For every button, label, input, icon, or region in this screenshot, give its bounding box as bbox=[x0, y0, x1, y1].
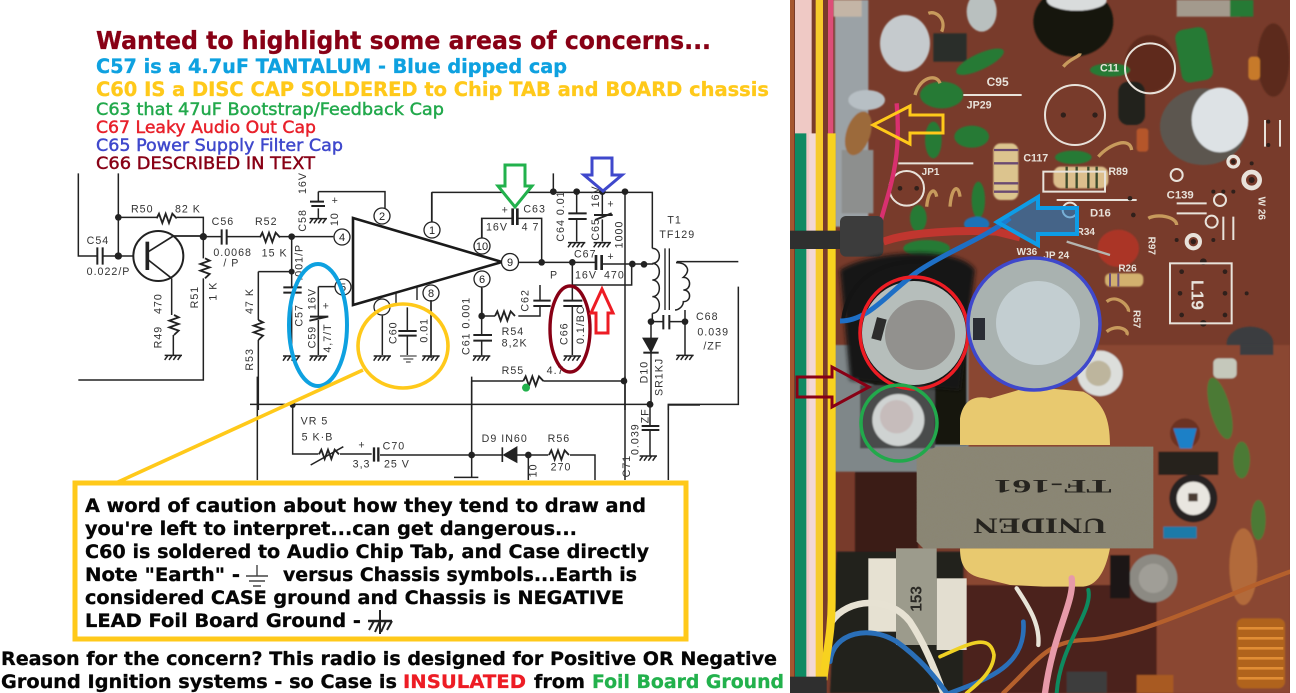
schematic: right section with output caps and transformer: C65 bbox=[590, 218, 602, 241]
schematic: right section with output caps and transformer: SR1KJ bbox=[654, 358, 666, 396]
schematic: left section with transistor and amplifier inputs bbox=[78, 172, 430, 410]
photo: silkscreen labels on board: R97 bbox=[1145, 237, 1156, 255]
photo: C67 electrolytic capacitor bbox=[862, 281, 966, 385]
schematic: left section with transistor and amplifier inputs: 1 K bbox=[208, 282, 220, 301]
schematic: lower section with VR5, C70, D9, R56: + bbox=[358, 439, 366, 451]
schematic: right section with output caps and transformer: TF129 bbox=[659, 229, 695, 241]
photo: silkscreen labels on board: D16 bbox=[1090, 208, 1111, 220]
schematic: lower section with VR5, C70, D9, R56 bbox=[250, 377, 700, 480]
caution text lines: versus Chassis symbols...Earth is bbox=[283, 565, 637, 586]
legend line C66: C66 DESCRIBED IN TEXT bbox=[96, 154, 316, 174]
bottom explanation text: Ground Ignition systems - so Case is bbox=[1, 671, 397, 693]
schematic: right section with output caps and transformer: R54 bbox=[502, 326, 524, 338]
schematic: right section with output caps and transformer: /ZF bbox=[703, 340, 722, 352]
photo: cap highlight blue arrow bbox=[997, 197, 1077, 245]
schematic: right section with output caps and transformer: C62 bbox=[519, 289, 531, 312]
schematic: left section with transistor and amplifier inputs: R50 bbox=[131, 204, 154, 216]
schematic: right section with output caps and transformer: C67 bbox=[574, 248, 597, 260]
schematic: lower section with VR5, C70, D9, R56: VR 5 bbox=[301, 416, 328, 428]
schematic: lower section with VR5, C70, D9, R56: 5 K·B bbox=[302, 432, 333, 444]
schematic: left section with transistor and amplifier inputs: + bbox=[332, 195, 339, 207]
schematic: left section with transistor and amplifier inputs: / P bbox=[223, 258, 239, 270]
schematic: right section with output caps and transformer: 0.1/BC bbox=[575, 305, 587, 344]
bottom explanation text: from bbox=[534, 671, 585, 693]
schematic: amplifier chip triangle with pin numbers: 2 bbox=[379, 211, 385, 223]
photo: yellow transformer bobbins bbox=[960, 387, 1110, 587]
photo: silkscreen labels on board: C95 bbox=[987, 75, 1009, 89]
schematic: left section with transistor and amplifier inputs: C59 bbox=[306, 326, 318, 348]
schematic: lower section with VR5, C70, D9, R56: D9 IN60 bbox=[482, 433, 528, 445]
schematic: right section with output caps and transformer: C63 bbox=[523, 204, 546, 216]
photo: metal transformer core bbox=[917, 447, 1153, 548]
schematic diagram bbox=[78, 172, 738, 480]
schematic: amplifier chip triangle with pin numbers: 1 bbox=[429, 225, 435, 237]
schematic: left section with transistor and amplifier inputs: 0.01 bbox=[418, 318, 430, 343]
photo panel: circuit board bbox=[790, 0, 1290, 693]
caution text lines: you're left to interpret...can get dangerous... bbox=[85, 519, 577, 540]
legend line C60: C60 IS a DISC CAP SOLDERED to Chip TAB and BOARD chassis bbox=[96, 78, 769, 101]
caution text lines: LEAD Foil Board Ground - bbox=[85, 611, 361, 632]
photo: silkscreen labels on board: W36 bbox=[1017, 247, 1038, 258]
schematic: lower section with VR5, C70, D9, R56: C70 bbox=[383, 440, 405, 452]
legend line C65: C65 Power Supply Filter Cap bbox=[96, 136, 343, 156]
photo: silkscreen labels on board: R89 bbox=[1108, 166, 1128, 178]
schematic: amplifier chip triangle with pin numbers: 8 bbox=[428, 288, 434, 300]
schematic: left section with transistor and amplifier inputs: 16V bbox=[306, 288, 318, 310]
photo: silkscreen labels on board: C117 bbox=[1023, 153, 1048, 165]
photo: silkscreen labels on board: C11 bbox=[1100, 63, 1119, 75]
schematic: right section with output caps and transformer: P bbox=[550, 269, 558, 281]
legend line C67: C67 Leaky Audio Out Cap bbox=[96, 118, 316, 138]
caution text lines bbox=[85, 496, 649, 632]
bottom explanation text bbox=[1, 648, 784, 693]
photo: C65 electrolytic capacitor bbox=[969, 259, 1099, 389]
legend: colour-coded capacitor notes bbox=[96, 55, 769, 174]
schematic: lower section with VR5, C70, D9, R56: 0.039 bbox=[629, 423, 641, 455]
caution text box bbox=[75, 483, 686, 639]
schematic: amplifier chip triangle with pin numbers: 6 bbox=[479, 274, 485, 286]
schematic: right section with output caps and transformer: 4.7 bbox=[547, 365, 564, 377]
schematic: left section with transistor and amplifier inputs: C56 bbox=[212, 216, 234, 228]
schematic: left section with transistor and amplifier inputs: C58 bbox=[297, 209, 309, 232]
photo: blue and black wires bbox=[840, 218, 1010, 321]
schematic: lower section with VR5, C70, D9, R56: R56 bbox=[548, 433, 570, 445]
schematic: left section with transistor and amplifier inputs: R51 bbox=[189, 286, 201, 308]
photo: silkscreen labels on board: C139 bbox=[1167, 189, 1194, 201]
arrow: green pointing to C63 bbox=[498, 165, 532, 207]
bottom explanation text: Reason for the concern? This radio is designed for Positive OR Negative bbox=[1, 648, 777, 670]
schematic: left section with transistor and amplifier inputs: 47 K bbox=[244, 288, 256, 314]
schematic: left section with transistor and amplifier inputs: C60 bbox=[388, 321, 400, 344]
schematic: amplifier chip triangle with pin numbers: 10 bbox=[476, 241, 488, 253]
bottom explanation text: Foil Board Ground bbox=[592, 671, 784, 693]
schematic: lower section with VR5, C70, D9, R56: 25 V bbox=[384, 458, 410, 470]
photo: cap highlight yellow arrow bbox=[873, 106, 943, 144]
caution text lines: Note "Earth" - bbox=[85, 565, 240, 586]
schematic: left section with transistor and amplifier inputs: R49 bbox=[153, 326, 165, 348]
schematic: right section with output caps and transformer: C61 0.001 bbox=[460, 297, 472, 355]
callout highlight: C60 yellow circle bbox=[358, 304, 448, 388]
photo: wire bundle running down the left edge bbox=[790, 0, 883, 693]
legend line C57: C57 is a 4.7uF TANTALUM - Blue dipped cap bbox=[96, 55, 567, 78]
schematic: left section with transistor and amplifier inputs: 10 bbox=[329, 212, 341, 226]
photo: component leads and resistor bands bbox=[915, 13, 1177, 335]
photo: silkscreen labels on board: JP29 bbox=[967, 99, 992, 111]
photo: upper wires and cable tie bbox=[880, 103, 1020, 242]
schematic: right section with output caps and transformer: 4 7 bbox=[522, 222, 539, 234]
schematic: right section with output caps and transformer: + bbox=[502, 204, 509, 216]
schematic: right section with output caps and transformer: C66 bbox=[559, 322, 571, 345]
schematic: left section with transistor and amplifier inputs: 0.0068 bbox=[213, 247, 252, 259]
schematic: right section with output caps and transformer: 470 bbox=[604, 269, 625, 281]
photo: silkscreen labels on board: R26 bbox=[1118, 264, 1137, 275]
schematic: amplifier chip triangle with pin numbers bbox=[334, 192, 518, 358]
schematic: right section with output caps and transformer: + bbox=[607, 198, 615, 210]
schematic: lower section with VR5, C70, D9, R56: 270 bbox=[551, 462, 571, 474]
leader line from C60 to caution box bbox=[118, 370, 363, 482]
schematic: lower section with VR5, C70, D9, R56: ZF bbox=[639, 408, 651, 423]
schematic: right section with output caps and transformer: 16V bbox=[575, 269, 597, 281]
schematic: left section with transistor and amplifier inputs: .001/P bbox=[294, 244, 306, 281]
schematic: right section with output caps and transformer: C64 0.01 bbox=[555, 190, 567, 242]
photo: coil windings bbox=[1238, 628, 1283, 678]
schematic: right section with output caps and transformer bbox=[422, 173, 738, 410]
photo: silkscreen labels on board: JP1 bbox=[922, 167, 940, 178]
schematic: right section with output caps and transformer: R55 bbox=[502, 365, 524, 377]
schematic: amplifier chip triangle with pin numbers: 9 bbox=[507, 257, 513, 269]
schematic: right section with output caps and transformer: 16V bbox=[486, 222, 508, 234]
photo: silkscreen traces and pads bbox=[889, 43, 1280, 248]
schematic: left section with transistor and amplifier inputs: 470 bbox=[153, 293, 165, 314]
schematic: left section with transistor and amplifier inputs: + bbox=[323, 300, 330, 312]
schematic: amplifier chip triangle with pin numbers: 4 bbox=[339, 232, 345, 244]
photo: silkscreen labels on board: R57 bbox=[1130, 310, 1141, 329]
schematic: right section with output caps and transformer: 1000 bbox=[613, 221, 625, 248]
photo: black area around electrolytic caps bbox=[840, 253, 975, 390]
photo: upper board components bbox=[833, 0, 1289, 360]
arrow: blue pointing to C65 bbox=[584, 158, 622, 191]
schematic: right section with output caps and transformer: 0.039 bbox=[697, 327, 729, 339]
photo: silkscreen labels on board bbox=[922, 63, 1266, 329]
schematic: left section with transistor and amplifier inputs: R52 bbox=[255, 216, 278, 228]
icon: earth ground symbol bbox=[246, 565, 268, 586]
photo: L19 coil footprint bbox=[1170, 263, 1232, 323]
arrow: red pointing to C67 bbox=[591, 289, 613, 333]
bottom explanation text: INSULATED bbox=[403, 671, 526, 693]
schematic: left section with transistor and amplifier inputs: 82 K bbox=[175, 204, 201, 216]
photo: small transformer and connector bbox=[868, 548, 967, 650]
photo: silkscreen labels on board: R34 bbox=[1077, 227, 1095, 238]
schematic: right section with output caps and transformer: T1 bbox=[667, 214, 682, 226]
photo: lower wires bbox=[830, 572, 1290, 693]
caution text lines: A word of caution about how they tend to draw and bbox=[85, 496, 646, 517]
photo: L19 coil footprint: L19 bbox=[1188, 280, 1208, 310]
schematic: lower section with VR5, C70, D9, R56: 3,3 bbox=[353, 458, 370, 470]
schematic: lower section with VR5, C70, D9, R56: 10 bbox=[528, 463, 540, 477]
caution text lines: considered CASE ground and Chassis is NEGATIVE bbox=[85, 588, 624, 609]
photo: lower board, transformer and wiring bbox=[830, 345, 1290, 693]
schematic: left section with transistor and amplifier inputs: 16V bbox=[297, 172, 309, 194]
schematic: right section with output caps and transformer: + bbox=[607, 251, 615, 263]
photo: metal transformer core: TF-161 bbox=[993, 475, 1112, 496]
caution text lines: C60 is soldered to Audio Chip Tab, and Case directly bbox=[85, 542, 649, 563]
schematic: left section with transistor and amplifier inputs: C54 bbox=[87, 235, 109, 247]
schematic: amplifier chip triangle with pin numbers: 5 bbox=[340, 282, 346, 294]
legend line C63: C63 that 47uF Bootstrap/Feedback Cap bbox=[96, 100, 444, 120]
photo: blue circle around C65 bbox=[968, 258, 1100, 390]
schematic: left section with transistor and amplifier inputs: 0.022/P bbox=[87, 266, 130, 278]
schematic: left section with transistor and amplifier inputs: C57 bbox=[294, 304, 306, 327]
photo: red circle around C67 bbox=[860, 277, 968, 389]
photo: metal transformer core: UNIDEN bbox=[973, 513, 1107, 538]
schematic: right section with output caps and transformer: 8,2K bbox=[502, 338, 528, 350]
icon: chassis ground symbol bbox=[368, 610, 392, 634]
photo: silkscreen labels on board: W 26 bbox=[1255, 197, 1266, 220]
schematic: lower section with VR5, C70, D9, R56: C71 bbox=[621, 455, 633, 477]
photo: green circle around C63 bbox=[861, 385, 937, 461]
photo: cap highlight maroon arrow bbox=[797, 367, 869, 407]
callout highlight: C57 blue ellipse bbox=[289, 264, 347, 386]
schematic: left section with transistor and amplifier inputs: R53 bbox=[244, 348, 256, 371]
title: Wanted to highlight some areas of concerns... bbox=[96, 26, 711, 55]
photo: silkscreen labels on board: JP 24 bbox=[1043, 250, 1070, 261]
callout highlight: C66 maroon ellipse bbox=[550, 286, 590, 372]
schematic: right section with output caps and transformer: 16V bbox=[590, 185, 602, 207]
photo: small transformer and connector: 153 bbox=[909, 586, 926, 612]
schematic: right section with output caps and transformer: D10 bbox=[638, 361, 650, 383]
schematic: left section with transistor and amplifier inputs: 4,7/T bbox=[322, 323, 334, 353]
schematic: right section with output caps and transformer: C68 bbox=[696, 311, 719, 323]
schematic: left section with transistor and amplifier inputs: 15 K bbox=[262, 248, 288, 260]
